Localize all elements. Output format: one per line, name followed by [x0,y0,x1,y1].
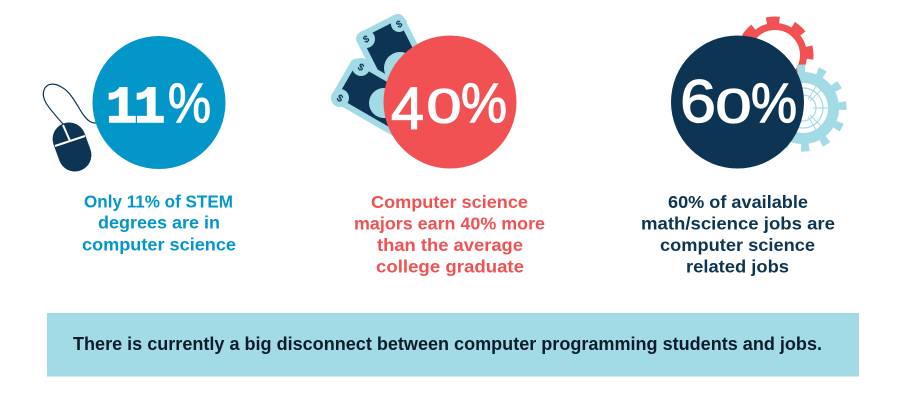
caption: 60% [641,192,835,276]
stat circle: 11% [92,36,226,169]
caption: 11%: degrees are in [98,212,220,232]
icon: dollar bills: $ [334,93,345,105]
stat circle: 60% [671,36,804,168]
caption: 60%: related jobs [686,256,789,276]
stat value: 60% [680,68,797,135]
icon: computer mouse [43,84,96,176]
stat value: 11%: 1 [134,79,165,138]
stat value: 11% [106,71,211,138]
icon: dollar bills: $ [361,34,372,46]
caption: 40% [354,192,545,276]
panel: 60 percent stat [641,12,848,276]
caption: 11%: Only 11% of STEM [84,192,233,212]
banner text: There is currently a big disconnect between computer programming students and jobs. [73,333,822,354]
caption: 11%: computer science [82,235,236,255]
caption: 60%: 60% of available [668,192,808,212]
stat value: 40%: % [461,71,507,134]
stat circle: 40% [384,36,516,168]
stat value: 11%: 1 [106,79,137,138]
caption: 40%: Computer science [371,192,528,212]
stat value: 60%: 6 [680,68,716,135]
panel: 40 percent stat [329,12,545,276]
caption: 40%: than the average [377,235,523,255]
stat value: 40%: 4 [391,76,424,142]
icon: dollar bills: $ [355,62,366,74]
panel: 11 percent stat [43,36,236,255]
caption: 11% [82,192,236,255]
icon: dollar bills [329,12,444,149]
caption: 40%: majors earn 40% more [354,214,545,234]
stat value: 11%: % [168,71,211,134]
icon: gears [732,12,848,153]
caption: 60%: computer science [660,235,815,255]
stat value: 40%: 0 [426,80,462,134]
caption: 40%: college graduate [376,256,524,276]
banner [47,313,859,376]
caption: 60%: math/science jobs are [641,214,835,234]
stat value: 60%: % [751,71,797,134]
icon: dollar bills: $ [394,19,405,31]
stat value: 40% [391,71,507,142]
stat value: 60%: 0 [716,80,752,134]
